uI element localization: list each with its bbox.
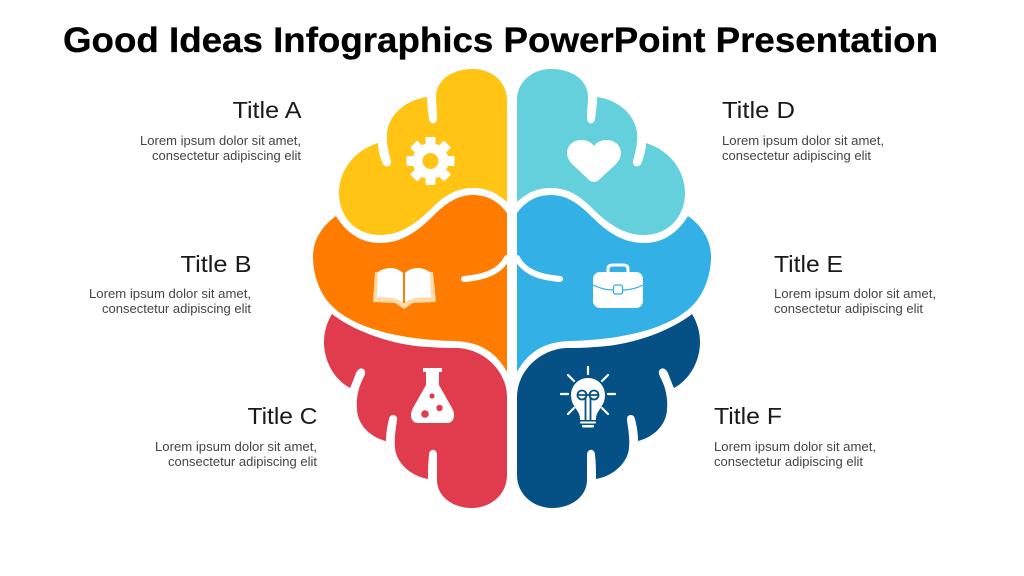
text block: Title B: Lorem ipsum dolor sit amet, <box>89 287 251 301</box>
text block: Title F: consectetur adipiscing elit <box>714 455 864 469</box>
text block: Title E <box>774 251 936 316</box>
text block: Title E: Title E <box>774 251 843 277</box>
icon: briefcase <box>593 265 643 308</box>
text block: Title B <box>89 251 252 316</box>
panel: brain yellow lobe <box>339 69 507 235</box>
panel: brain light blue lobe <box>517 195 711 372</box>
panel: brain navy lobe <box>517 314 700 508</box>
text block: Title E: Lorem ipsum dolor sit amet, <box>774 287 936 301</box>
text block: Title D <box>722 97 884 163</box>
text block: Title B: Title B <box>180 251 252 277</box>
text block: Title F <box>714 403 876 469</box>
icon: flask <box>411 368 454 423</box>
text block: Title B: consectetur adipiscing elit <box>102 302 252 316</box>
text block: Title D: Title D <box>722 97 795 123</box>
text block: Title C: Lorem ipsum dolor sit amet, <box>155 440 317 454</box>
text block: Title A: Lorem ipsum dolor sit amet, <box>140 134 301 148</box>
text block: Title A: Title A <box>232 97 302 123</box>
text block: Title E: consectetur adipiscing elit <box>774 302 924 316</box>
icon: light bulb <box>561 367 615 428</box>
text block: Title F: Lorem ipsum dolor sit amet, <box>714 440 876 454</box>
icon: open book <box>373 268 436 309</box>
icon: gear <box>406 137 454 185</box>
icon: orange lobe fold <box>464 258 507 279</box>
panel: brain red lobe <box>324 314 507 508</box>
text block: Title A <box>140 97 302 163</box>
text block: Title C <box>155 403 318 469</box>
text block: Title A: consectetur adipiscing elit <box>152 149 302 163</box>
icon: heart <box>567 140 621 182</box>
text block: Title C: Title C <box>248 403 318 429</box>
text block: Title D: consectetur adipiscing elit <box>722 149 872 163</box>
icon: blue lobe fold <box>517 258 560 279</box>
panel: brain orange lobe <box>313 195 507 372</box>
title: Good Ideas Infographics PowerPoint Presentation <box>63 21 938 60</box>
panel: brain teal lobe <box>517 69 685 235</box>
text block: Title C: consectetur adipiscing elit <box>168 455 318 469</box>
text block: Title F: Title F <box>714 403 782 429</box>
text block: Title D: Lorem ipsum dolor sit amet, <box>722 134 884 148</box>
